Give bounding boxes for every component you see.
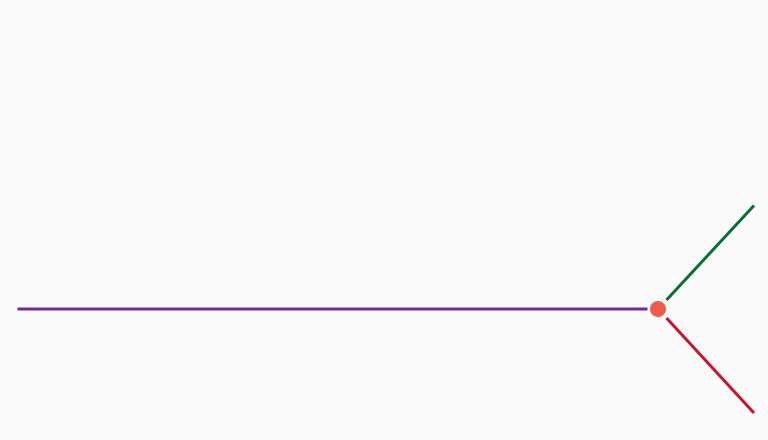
purple line — [18, 308, 648, 310]
central node — [650, 301, 666, 317]
red line — [666, 318, 754, 413]
green line — [666, 206, 754, 300]
